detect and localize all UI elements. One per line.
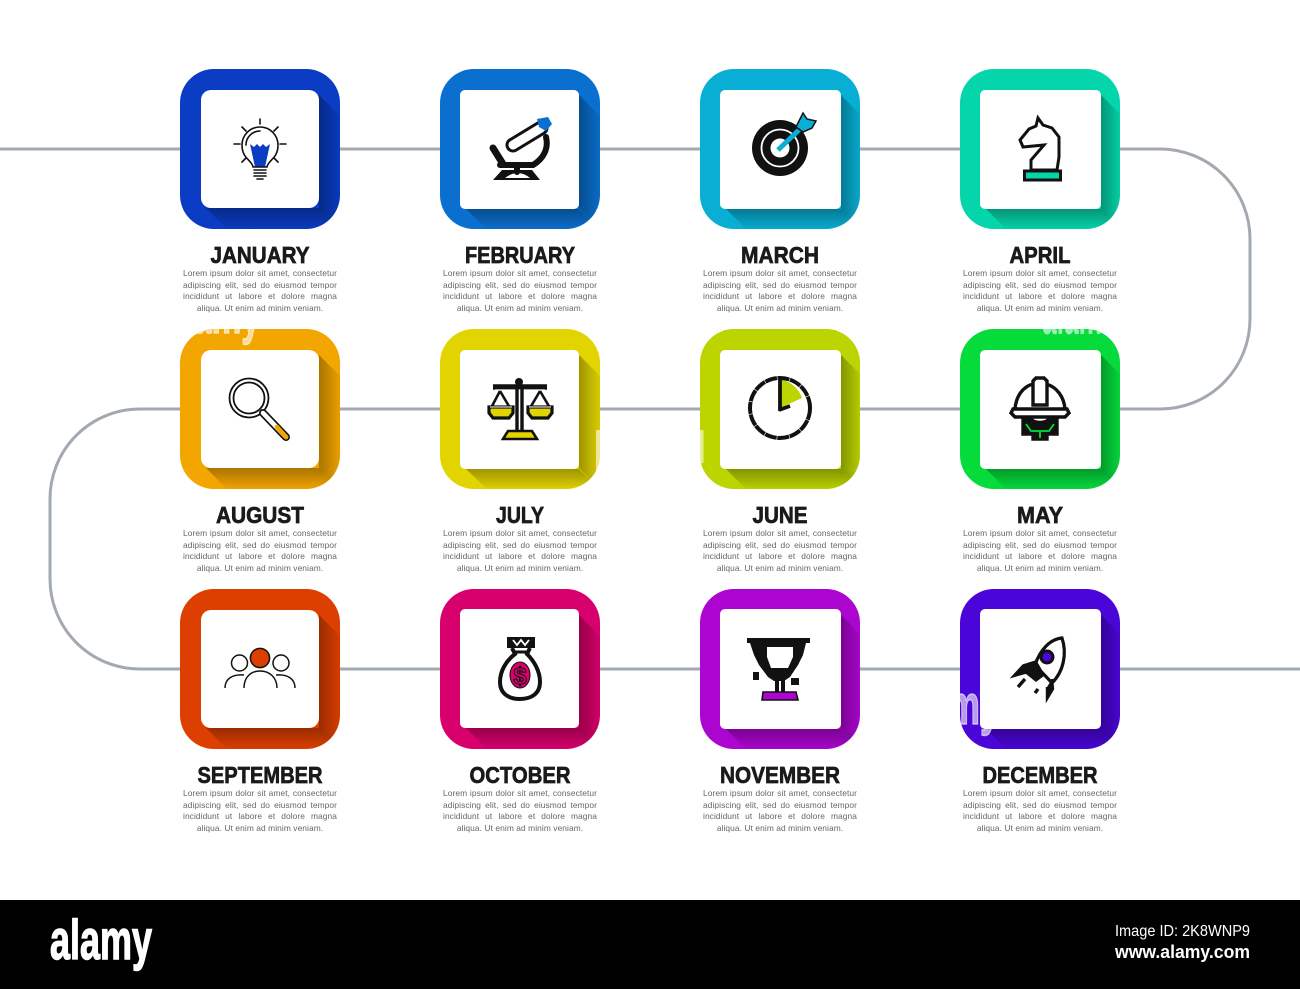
body text: [963, 268, 1117, 313]
body text: Lorem ipsum dolor sit amet, consectetur: [183, 788, 337, 798]
body text: incididunt ut labore et dolore magna: [183, 291, 337, 301]
body text: Lorem ipsum dolor sit amet, consectetur: [183, 528, 337, 538]
heading: JULY: [496, 502, 544, 528]
footer watermark bar: [0, 900, 1300, 989]
body text: Lorem ipsum dolor sit amet, consectetur: [443, 788, 597, 798]
body text: incididunt ut labore et dolore magna: [183, 811, 337, 821]
body text: aliqua. Ut enim ad minim veniam.: [977, 563, 1103, 573]
body text: aliqua. Ut enim ad minim veniam.: [197, 303, 323, 313]
website: www.alamy.com: [1114, 942, 1250, 962]
body text: adipiscing elit, sed do eiusmod tempor: [963, 540, 1117, 550]
body text: [703, 528, 857, 573]
icon: target with dart: [752, 113, 816, 176]
body text: adipiscing elit, sed do eiusmod tempor: [443, 540, 597, 550]
body text: adipiscing elit, sed do eiusmod tempor: [443, 280, 597, 290]
icon: rocket: [1012, 638, 1064, 699]
icon: money bag: $: [513, 663, 527, 690]
icon: magnifying glass: [230, 378, 286, 437]
logo: alamy: alamy: [50, 908, 152, 971]
heading: OCTOBER: [470, 762, 571, 788]
watermark fragment: [700, 430, 704, 463]
body text: [183, 268, 337, 313]
body text: adipiscing elit, sed do eiusmod tempor: [963, 800, 1117, 810]
panel: November: [700, 589, 860, 833]
body text: Lorem ipsum dolor sit amet, consectetur: [703, 528, 857, 538]
body text: aliqua. Ut enim ad minim veniam.: [457, 823, 583, 833]
body text: Lorem ipsum dolor sit amet, consectetur: [703, 788, 857, 798]
panel: December: [960, 589, 1120, 833]
panel: June: [700, 329, 860, 573]
body text: aliqua. Ut enim ad minim veniam.: [717, 563, 843, 573]
body text: aliqua. Ut enim ad minim veniam.: [197, 823, 323, 833]
body text: aliqua. Ut enim ad minim veniam.: [717, 823, 843, 833]
icon: team of people: [225, 648, 295, 688]
icon: clock: [750, 377, 810, 438]
body text: aliqua. Ut enim ad minim veniam.: [717, 303, 843, 313]
panel: August: [180, 329, 340, 573]
heading: JUNE: [752, 502, 808, 528]
body text: [703, 788, 857, 833]
body text: [183, 788, 337, 833]
watermark fragment: [596, 430, 600, 470]
body text: adipiscing elit, sed do eiusmod tempor: [183, 280, 337, 290]
body text: adipiscing elit, sed do eiusmod tempor: [443, 800, 597, 810]
body text: adipiscing elit, sed do eiusmod tempor: [703, 800, 857, 810]
body text: incididunt ut labore et dolore magna: [183, 551, 337, 561]
body text: adipiscing elit, sed do eiusmod tempor: [703, 540, 857, 550]
watermark fragment: alamy: [898, 673, 1000, 736]
heading: AUGUST: [216, 502, 304, 528]
panel: January: [180, 69, 340, 313]
body text: Lorem ipsum dolor sit amet, consectetur: [963, 268, 1117, 278]
icon: money bag: [500, 637, 540, 699]
body text: Lorem ipsum dolor sit amet, consectetur: [443, 268, 597, 278]
heading: SEPTEMBER: [198, 762, 323, 788]
heading: MARCH: [741, 242, 819, 268]
watermark fragment: alamy: [165, 282, 260, 345]
icon: chess knight: [1020, 118, 1060, 180]
icon: light bulb: [234, 119, 286, 179]
body text: incididunt ut labore et dolore magna: [963, 811, 1117, 821]
panel: July: [440, 329, 600, 573]
image id: Image ID: 2K8WNP9: [1115, 923, 1250, 940]
body text: Lorem ipsum dolor sit amet, consectetur: [703, 268, 857, 278]
body text: incididunt ut labore et dolore magna: [703, 551, 857, 561]
body text: aliqua. Ut enim ad minim veniam.: [457, 563, 583, 573]
body text: [963, 528, 1117, 573]
heading: MAY: [1017, 502, 1063, 528]
panel: April: [960, 69, 1120, 313]
body text: aliqua. Ut enim ad minim veniam.: [977, 823, 1103, 833]
body text: adipiscing elit, sed do eiusmod tempor: [183, 800, 337, 810]
body text: Lorem ipsum dolor sit amet, consectetur: [963, 788, 1117, 798]
panel: February: [440, 69, 600, 313]
panel: September: [180, 589, 340, 833]
body text: incididunt ut labore et dolore magna: [963, 291, 1117, 301]
text: alam: [1042, 283, 1102, 346]
body text: adipiscing elit, sed do eiusmod tempor: [963, 280, 1117, 290]
icon: trophy: [747, 638, 810, 700]
heading: APRIL: [1010, 242, 1070, 268]
body text: Lorem ipsum dolor sit amet, consectetur: [963, 528, 1117, 538]
body text: [443, 268, 597, 313]
body text: Lorem ipsum dolor sit amet, consectetur: [183, 268, 337, 278]
body text: incididunt ut labore et dolore magna: [703, 811, 857, 821]
panel: March: [700, 69, 860, 313]
body text: aliqua. Ut enim ad minim veniam.: [457, 303, 583, 313]
body text: adipiscing elit, sed do eiusmod tempor: [703, 280, 857, 290]
body text: adipiscing elit, sed do eiusmod tempor: [183, 540, 337, 550]
icon: hard hat worker: [1011, 378, 1069, 439]
body text: incididunt ut labore et dolore magna: [443, 291, 597, 301]
heading: DECEMBER: [982, 762, 1098, 788]
body text: aliqua. Ut enim ad minim veniam.: [197, 563, 323, 573]
panel: October: [440, 589, 600, 833]
body text: [703, 268, 857, 313]
icon: balance scales: [489, 378, 552, 439]
body text: [443, 788, 597, 833]
icon: microscope: [493, 117, 552, 180]
heading: FEBRUARY: [465, 242, 575, 268]
body text: [183, 528, 337, 573]
panel: May: [960, 329, 1120, 573]
body text: Lorem ipsum dolor sit amet, consectetur: [443, 528, 597, 538]
heading: NOVEMBER: [720, 762, 840, 788]
body text: incididunt ut labore et dolore magna: [443, 811, 597, 821]
body text: incididunt ut labore et dolore magna: [443, 551, 597, 561]
body text: incididunt ut labore et dolore magna: [963, 551, 1117, 561]
body text: incididunt ut labore et dolore magna: [703, 291, 857, 301]
heading: JANUARY: [210, 242, 310, 268]
body text: [963, 788, 1117, 833]
body text: aliqua. Ut enim ad minim veniam.: [977, 303, 1103, 313]
body text: [443, 528, 597, 573]
